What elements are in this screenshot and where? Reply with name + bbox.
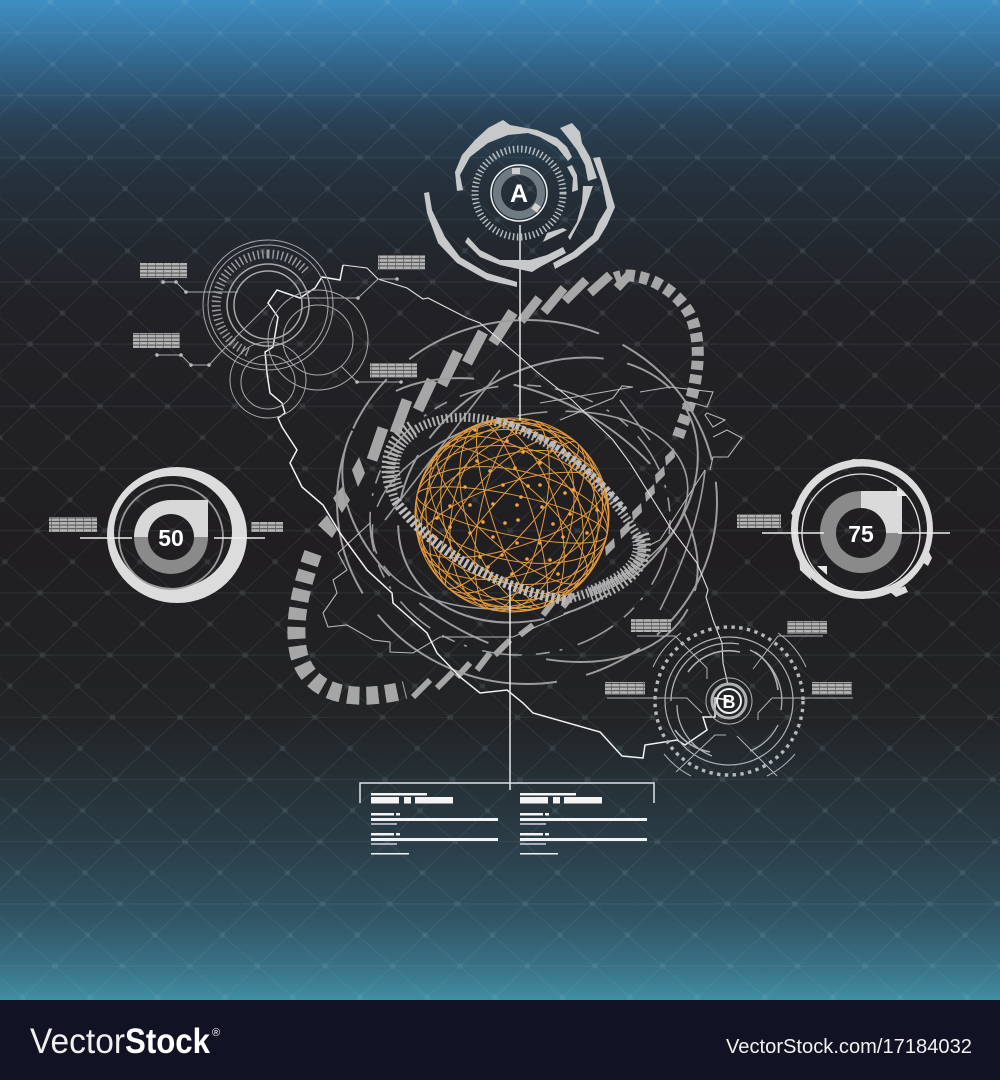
main jagged outline (343, 265, 728, 685)
footer bar (0, 1000, 1000, 1080)
right column (520, 793, 647, 854)
outer hatched ring (296, 274, 698, 697)
footer id: VectorStock.com/17184032 (726, 1036, 972, 1058)
gauge 75 (762, 459, 950, 599)
wireframe sphere (384, 386, 640, 644)
footer logo: Stock (125, 1022, 210, 1061)
gauge A (424, 120, 615, 287)
connector line from sphere to data panel (509, 585, 511, 790)
footer logo: Vector (30, 1022, 125, 1061)
tick band upper front (497, 420, 625, 510)
footer logo: ® (212, 1027, 220, 1039)
gauge 50 value: 50 (158, 525, 184, 551)
data labels (49, 255, 852, 695)
left column (371, 793, 498, 854)
gauge B letter: B (722, 692, 736, 712)
gauge 50 (80, 467, 265, 603)
data panel (360, 783, 654, 854)
ring diamonds (318, 448, 675, 556)
gauge B (607, 627, 853, 776)
radar cluster upper left (155, 240, 403, 418)
gauge A letter: A (510, 180, 528, 208)
tick band in front of sphere (395, 500, 565, 600)
thin continent outlines (323, 386, 742, 653)
connector line from gauge A to sphere (519, 225, 521, 420)
footer logo (30, 1022, 220, 1061)
orbit rings (294, 303, 747, 720)
gauge 75 value: 75 (848, 521, 874, 547)
tick band behind sphere (390, 417, 642, 600)
